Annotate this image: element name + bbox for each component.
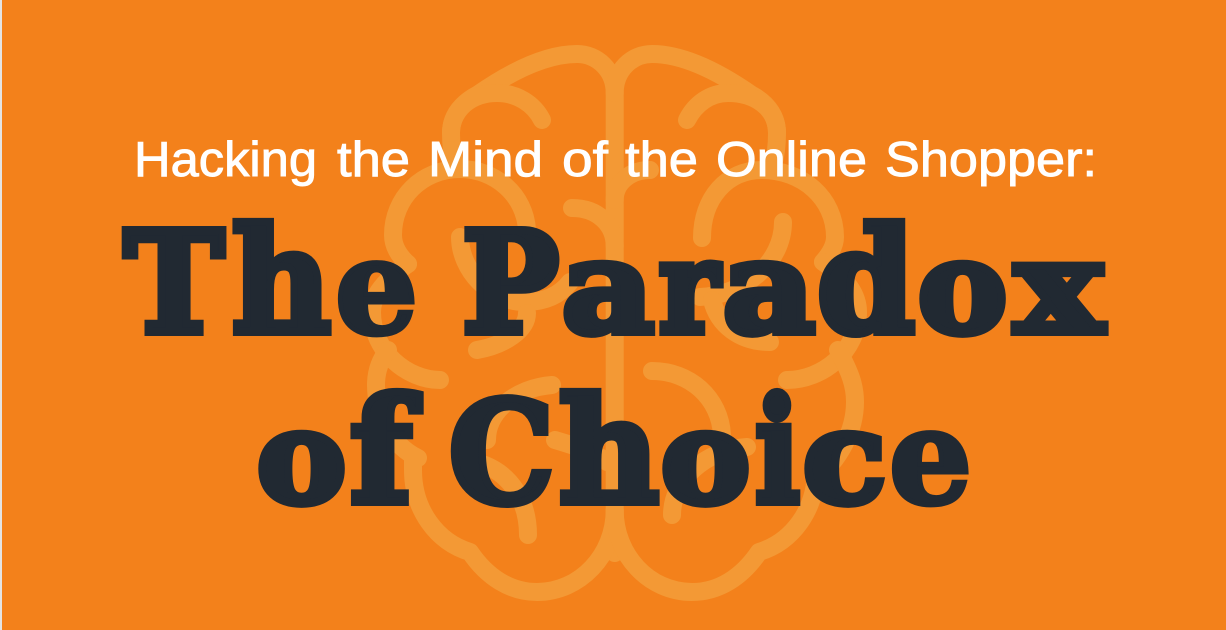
icon: brain outline	[372, 54, 858, 592]
title line 2: of Choice: o	[257, 383, 346, 533]
main title	[124, 197, 1105, 537]
title line 2: of Choice: e	[889, 380, 972, 535]
title line 1: The Paradox: o	[918, 213, 1007, 363]
title line 2: of Choice: h	[559, 367, 659, 537]
title line 1: The Paradox: x	[1015, 213, 1105, 363]
title line 2: of Choice: C	[449, 372, 554, 536]
title line 1: The Paradox: T	[124, 202, 224, 366]
title line 2: of Choice: f	[350, 367, 421, 537]
title line 1: The Paradox: a	[562, 213, 654, 363]
title line 1: The Paradox: h	[232, 197, 331, 367]
subtitle	[134, 133, 1097, 187]
title line 1: The Paradox	[124, 197, 1105, 367]
title line 2: of Choice: i	[755, 367, 800, 537]
title line 1: The Paradox: d	[817, 197, 915, 367]
title line 1: The Paradox: P	[462, 202, 559, 366]
title line 2: of Choice: c	[803, 383, 886, 533]
title line 1: The Paradox: e	[335, 210, 418, 365]
subtitle: the	[337, 133, 410, 187]
title line 2: of Choice: o	[661, 383, 750, 533]
subtitle: Hacking	[134, 133, 317, 187]
title line 2: of Choice	[257, 367, 972, 537]
subtitle: Shopper:	[885, 133, 1097, 187]
title line 1: The Paradox: a	[723, 213, 815, 363]
subtitle: Online	[716, 133, 867, 187]
title line 1: The Paradox: r	[659, 213, 720, 363]
subtitle: Mind	[428, 133, 543, 187]
subtitle: the	[625, 133, 698, 187]
subtitle: of	[562, 133, 608, 187]
